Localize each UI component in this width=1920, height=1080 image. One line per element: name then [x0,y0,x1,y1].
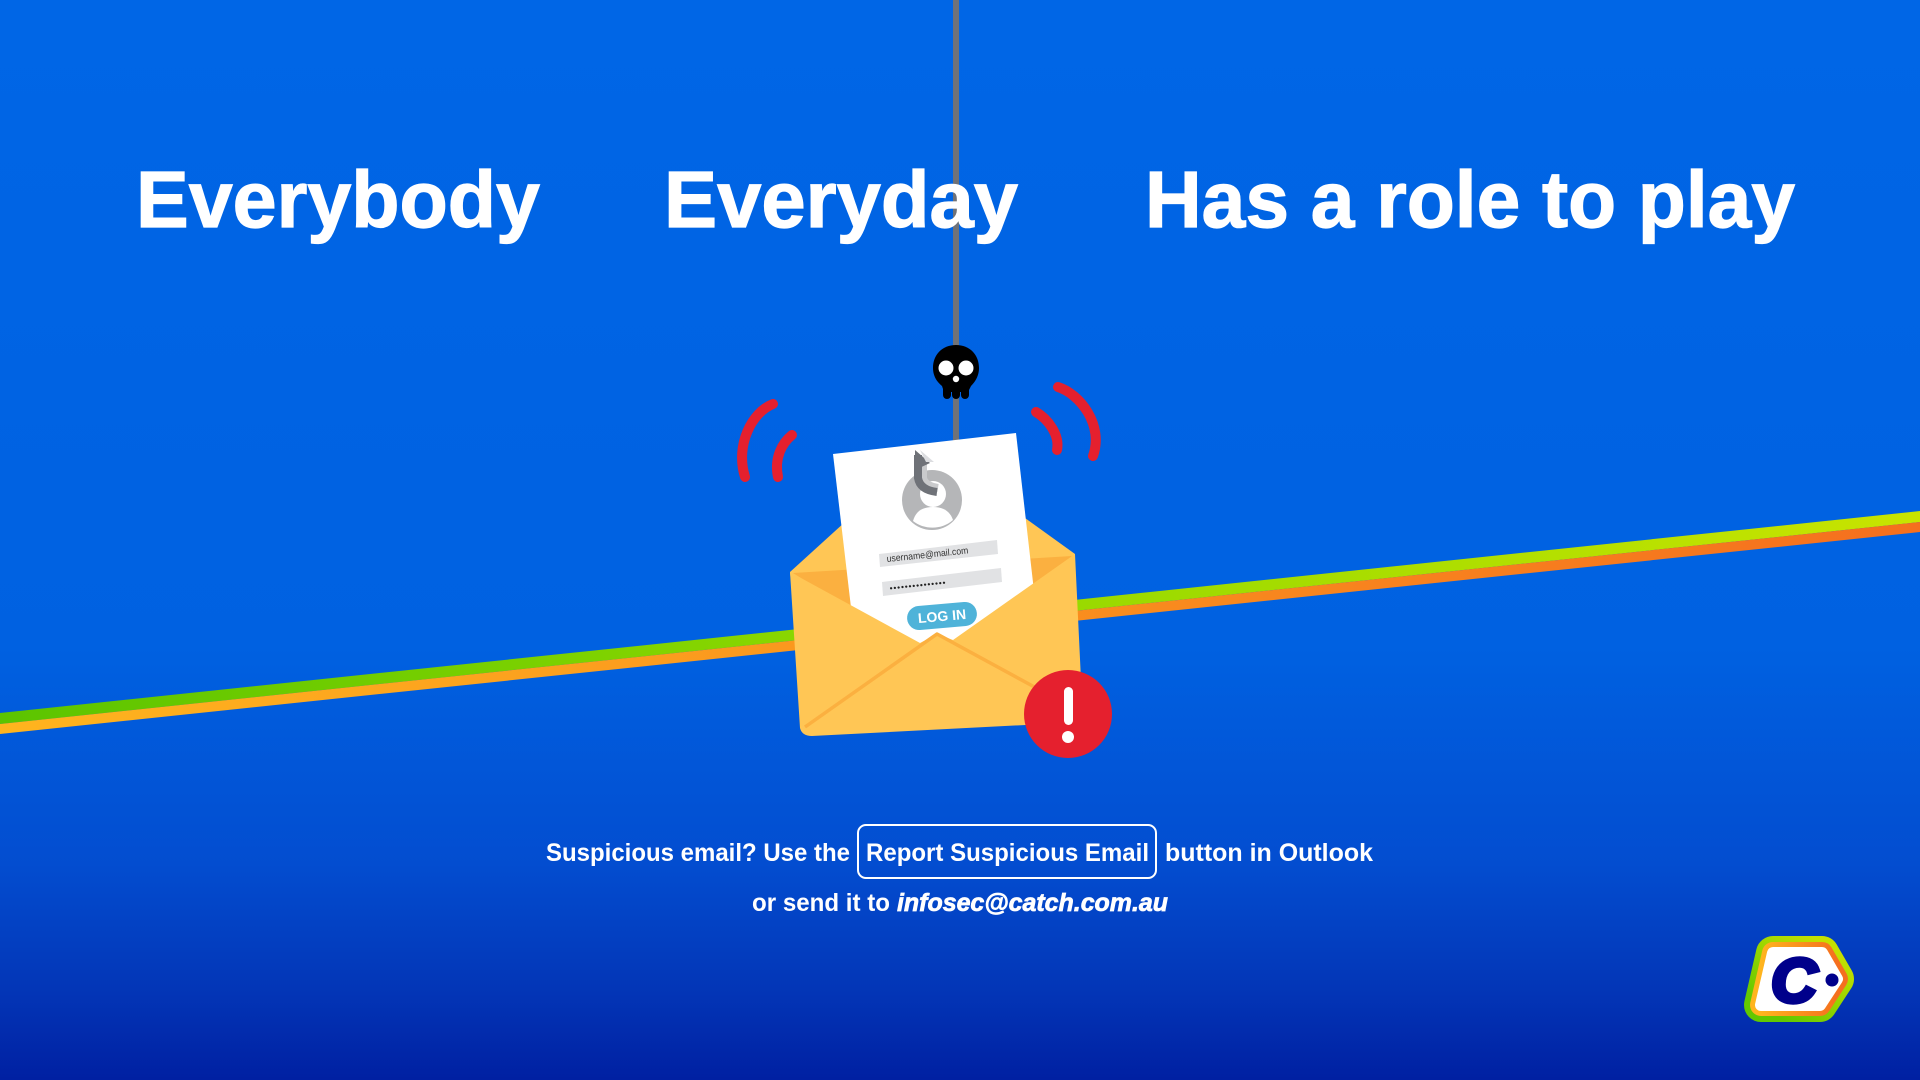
avatar [902,470,962,530]
rainbow diagonal stripe [0,511,1920,734]
logo: Catch tag: C [1771,947,1818,1016]
line one: start: Suspicious email? Use the [546,839,850,867]
heading: Everybody: Everybody [136,155,541,244]
hook [915,450,938,492]
password field [882,568,1002,596]
username field: username@mail.com [886,545,969,565]
email address: infosec@catch.com.au [897,889,1168,917]
icon: red alert waves left [742,404,792,477]
line two: start: or send it to [752,889,890,917]
icon: skull [933,345,979,399]
username field [879,540,998,567]
icon: red alert waves right [1036,387,1096,456]
icon: alert badge [1024,670,1112,758]
envelope flap crease [805,634,1040,727]
logo: Catch tag [1761,947,1838,1016]
envelope front [790,554,1083,736]
log in button: LOG IN [917,606,967,626]
envelope back flap [790,518,1075,620]
log in button [906,601,978,631]
heading: Has a role to play: Has a role to play [1145,155,1795,244]
fishing line [953,0,959,445]
report button label: Report Suspicious Email [866,839,1149,867]
envelope inner shadow [793,556,1072,615]
call to action text [546,825,1373,917]
illustration: envelope with phishing login form [790,433,1083,736]
report button outline [858,825,1156,878]
login sheet [833,433,1037,650]
password field: ••••••••••••••• [889,578,946,593]
line one: end: button in Outlook [1165,839,1373,867]
heading: Everyday: Everyday [664,155,1018,244]
